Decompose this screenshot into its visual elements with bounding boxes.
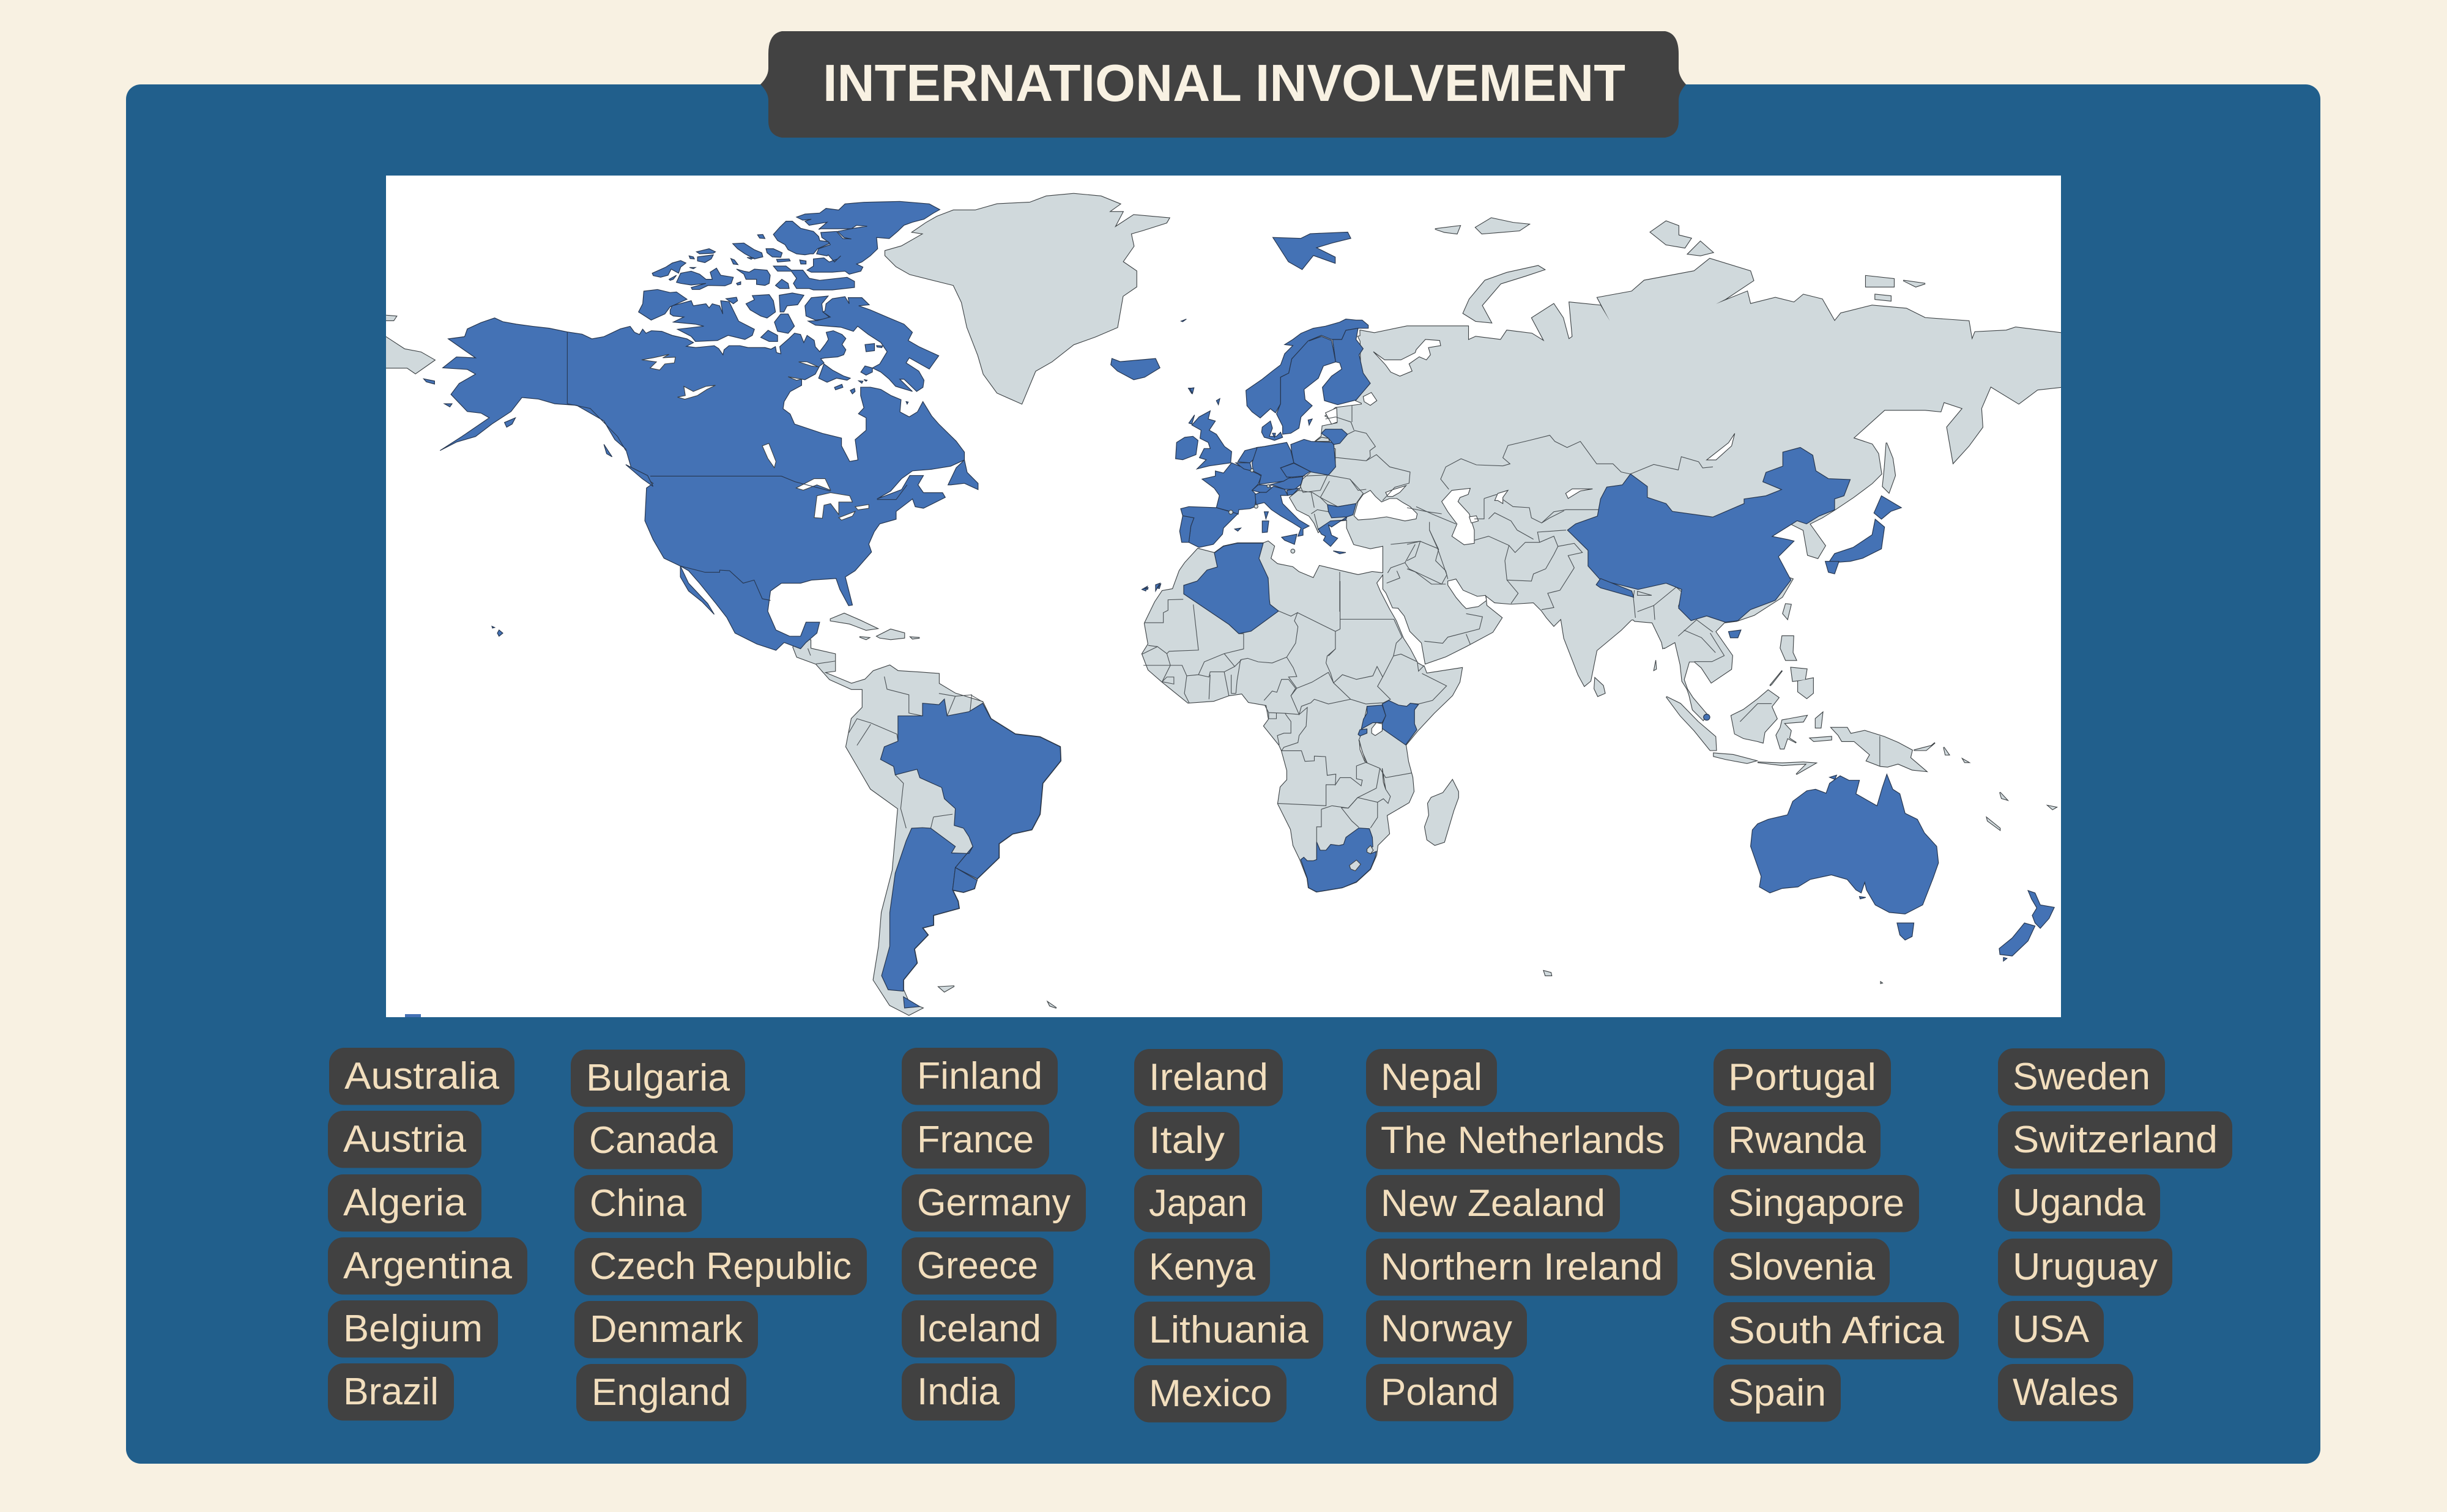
Antarctic sliver (405, 1014, 421, 1017)
chip: India (902, 1363, 1015, 1420)
chip: Poland (1366, 1364, 1513, 1421)
chip: Wales: Wales (2013, 1371, 2118, 1414)
country chips: column 1 (328, 1048, 527, 1420)
chip: India: India (917, 1371, 1000, 1413)
lakes in North America (642, 354, 869, 520)
title banner (760, 31, 1686, 138)
chip: Bulgaria (571, 1050, 745, 1107)
chip: Nepal (1366, 1049, 1497, 1106)
chip: France: France (917, 1119, 1034, 1161)
chip: Switzerland (1998, 1111, 2232, 1168)
chip: China: China (590, 1182, 686, 1225)
chip: USA: USA (2013, 1308, 2090, 1351)
chip: Brazil (328, 1363, 454, 1420)
chip: Sweden: Sweden (2013, 1056, 2150, 1098)
grey land masses (385, 194, 2066, 1015)
chip: Australia (329, 1048, 514, 1105)
chip: Australia: Australia (344, 1055, 500, 1097)
chip: Finland (902, 1048, 1058, 1105)
chip: Italy (1134, 1112, 1239, 1169)
chip: South Africa: South Africa (1728, 1310, 1945, 1352)
chip: Denmark: Denmark (590, 1308, 743, 1351)
highlighted countries: North America and Iceland (424, 318, 1194, 650)
chip: Rwanda (1714, 1112, 1881, 1169)
chip: Singapore: Singapore (1728, 1182, 1904, 1225)
map background (386, 176, 2061, 1017)
chip: Mexico: Mexico (1149, 1373, 1272, 1415)
chip: France (902, 1111, 1049, 1168)
chip: Finland: Finland (917, 1055, 1042, 1097)
chip: Sweden (1998, 1048, 2165, 1106)
tiny islands (1543, 660, 1882, 984)
highlighted countries: Africa (1145, 543, 1419, 892)
chip: Norway: Norway (1381, 1308, 1512, 1350)
chip: Uganda (1998, 1174, 2160, 1232)
chip: Northern Ireland: Northern Ireland (1381, 1246, 1663, 1288)
chip: Switzerland: Switzerland (2013, 1119, 2218, 1161)
chip: The Netherlands: The Netherlands (1381, 1119, 1665, 1162)
chip: Lithuania: Lithuania (1149, 1309, 1309, 1351)
chip: Japan (1134, 1175, 1262, 1232)
chip: Germany: Germany (917, 1182, 1071, 1224)
chip: Northern Ireland (1366, 1239, 1677, 1295)
chip: Norway (1366, 1300, 1527, 1358)
chip: Uruguay (1998, 1239, 2172, 1295)
chip: Slovenia: Slovenia (1728, 1246, 1876, 1288)
chip: New Zealand: New Zealand (1381, 1182, 1605, 1225)
chip: Iceland: Iceland (917, 1308, 1041, 1350)
chip: Kenya: Kenya (1149, 1246, 1255, 1288)
chip: Czech Republic (574, 1238, 867, 1295)
chip: Ireland (1134, 1049, 1283, 1106)
chip: Greece: Greece (917, 1245, 1038, 1287)
chip: China (574, 1175, 702, 1232)
chip: Argentina: Argentina (343, 1245, 513, 1287)
chip: Portugal (1714, 1049, 1891, 1106)
chip: Algeria (328, 1174, 481, 1232)
chip: Spain (1714, 1365, 1841, 1421)
chip: Ireland: Ireland (1149, 1056, 1268, 1099)
country chips: column 4 (1134, 1049, 1323, 1423)
chip: England: England (592, 1371, 731, 1414)
chip: Algeria: Algeria (343, 1182, 467, 1224)
chip: Germany (902, 1174, 1086, 1232)
country borders: grey countries (808, 406, 1880, 859)
chip: Canada: Canada (589, 1119, 718, 1162)
inland seas and lakes (1326, 339, 1735, 790)
chip: England (576, 1364, 746, 1421)
highlighted countries: South America (880, 699, 1061, 1008)
title banner: INTERNATIONAL INVOLVEMENT (823, 54, 1625, 113)
chip: Rwanda: Rwanda (1728, 1119, 1866, 1162)
chip: Argentina (328, 1237, 527, 1294)
chip: Portugal: Portugal (1728, 1056, 1876, 1099)
chip: Wales (1998, 1364, 2133, 1421)
country chips: column 7 (1998, 1048, 2232, 1421)
chip: Uganda: Uganda (2013, 1182, 2146, 1224)
country chips: column 5 (1366, 1049, 1679, 1421)
chip: Japan: Japan (1149, 1182, 1247, 1225)
chip: Spain: Spain (1728, 1372, 1826, 1414)
chip: South Africa (1714, 1302, 1959, 1359)
chip: Poland: Poland (1381, 1371, 1499, 1414)
chip: Kenya (1134, 1239, 1270, 1295)
chip: Denmark (574, 1301, 758, 1358)
country chips: column 3 (902, 1048, 1086, 1420)
country chips: column 2 (571, 1050, 867, 1421)
chip: Singapore (1714, 1175, 1919, 1232)
internal borders of highlighted countries (567, 332, 1321, 601)
highlighted countries: Svalbard, China, Nepal, Japan (1273, 232, 1901, 638)
world map (385, 176, 2066, 1017)
chip: Italy: Italy (1149, 1119, 1225, 1162)
chip: Slovenia (1714, 1239, 1890, 1295)
chip: Belgium (328, 1300, 498, 1358)
chip: Lithuania (1134, 1302, 1323, 1359)
chip: Canada (574, 1112, 733, 1169)
chip: The Netherlands (1366, 1112, 1679, 1169)
chip: New Zealand (1366, 1175, 1620, 1232)
Canadian Arctic islands (639, 201, 940, 404)
highlighted countries: Europe (1176, 319, 1370, 554)
chip: Greece (902, 1237, 1053, 1294)
highlighted countries: Australia, New Zealand, Singapore (1704, 714, 2054, 961)
chip: Iceland (902, 1300, 1056, 1358)
chip: Belgium: Belgium (343, 1308, 483, 1350)
country chips: column 6 (1714, 1049, 1959, 1421)
chip: Nepal: Nepal (1381, 1056, 1482, 1099)
chip: Uruguay: Uruguay (2013, 1246, 2158, 1288)
chip: Bulgaria: Bulgaria (586, 1057, 730, 1099)
chip: Mexico (1134, 1365, 1287, 1423)
chip: Austria: Austria (343, 1118, 467, 1160)
chip: Brazil: Brazil (343, 1371, 439, 1413)
chip: USA (1998, 1301, 2104, 1358)
chip: Czech Republic: Czech Republic (590, 1245, 852, 1288)
chip: Austria (328, 1111, 481, 1168)
small enclaves in Europe (1229, 437, 1329, 553)
